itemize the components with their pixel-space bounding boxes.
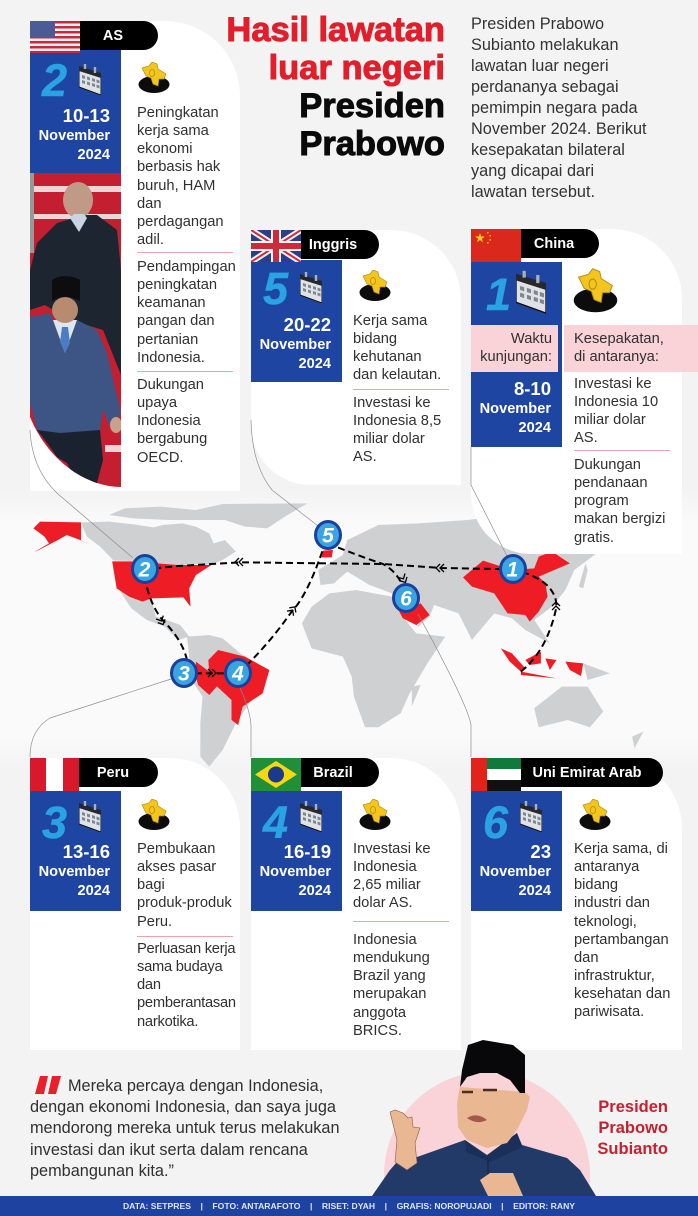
pill label [251,230,379,259]
card: AS: 2 [42,55,67,106]
text: Inggris points: Indonesia 8,5 [353,413,441,429]
card: AS: November [39,128,110,144]
text: AS points: dan [137,196,162,212]
text: China points: makan bergizi [574,511,665,527]
card: Uni Emirat Arab: 23 [530,841,551,862]
text: AS points: OECD. [137,450,184,466]
intro text: kesepakatan bilateral [471,141,625,159]
text: UEA points [574,841,670,1020]
text: China points: Dukungan [574,457,641,473]
text: Peru points: Pembukaan [137,841,215,857]
pill label [471,758,663,787]
card: Brazil [251,758,390,911]
text: UEA points: pariwisata. [574,1004,644,1020]
map pins: 3 [178,662,190,686]
text: Inggris points: Kerja sama [353,313,427,329]
card: Inggris: November [260,337,331,353]
text: Inggris points: dan kelautan. [353,367,441,383]
date box [251,260,342,382]
title [226,11,445,163]
intro text: lawatan luar negeri [471,57,609,75]
text: China points: program [574,493,629,509]
text: China points [574,376,670,546]
intro text: November 2024. Berikut [471,120,647,138]
card: Peru: November [39,864,110,880]
text: Peru points: Peru. [137,914,172,930]
panel: card Peru background [30,758,240,1050]
intro text: perdananya sebagai [471,78,619,96]
map pins: 1 [507,558,518,582]
card: AS [30,21,170,487]
title: Presiden [299,87,445,125]
title: luar negeri [269,49,445,87]
quote: investasi dan ikut serta dalam rencana [30,1141,308,1159]
card: Inggris: Inggris [309,237,357,253]
text: Peru points: dan [137,977,161,993]
caption: Presiden Prabowo Subianto: Subianto [597,1140,668,1158]
text: Peru points: akses pasar [137,859,216,875]
card: Inggris [251,230,390,382]
text: UEA points: industri dan [574,895,650,911]
card: Uni Emirat Arab: 2024 [519,882,551,898]
text: AS points: pangan dan [137,313,215,329]
card: AS: 10-13 [63,105,110,126]
text: Peru points: narkotika. [137,1014,198,1030]
quote: mendorong mereka untuk terus melakukan [30,1119,340,1137]
text: China points: Investasi ke [574,376,652,392]
label band: waktu kunjungan: kunjungan: [480,349,552,365]
text: AS points: pertanian [137,332,198,348]
text: AS points: Dukungan [137,377,204,393]
text: AS points: keamanan [137,295,206,311]
card: Uni Emirat Arab: November [480,864,551,880]
panel: card UEA background [471,758,682,1050]
text: AS points: peningkatan [137,277,217,293]
text: AS points: Pendampingan [137,259,236,275]
icon: quote mark [35,1076,61,1094]
text: AS points: bergabung [137,431,207,447]
text: AS points: adil. [137,232,164,248]
text: Peru points: pemberantasan [137,995,236,1011]
map pins: 5 [322,524,334,548]
card: Uni Emirat Arab: Uni Emirat Arab [532,765,642,781]
text: AS points: Indonesia [137,413,201,429]
illustration: Presiden Prabowo [372,1040,596,1196]
card: AS: AS [103,28,123,44]
text: Peru points: sama budaya [137,959,222,975]
card: Brazil: Brazil [313,765,353,781]
text: China points: Indonesia 10 [574,394,658,410]
quote [30,1077,340,1180]
text: Inggris points: Investasi ke [353,395,431,411]
text: Brazil points: 2,65 miliar [353,877,421,893]
label band: kesepakatan: di antaranya: [574,349,659,365]
text: Brazil points [353,841,449,1039]
flag: China [471,229,521,262]
card: Inggris: 20-22 [284,314,331,335]
text: AS points [137,105,236,466]
panel: card AS background [30,21,240,491]
intro text: lawatan tersebut. [471,183,595,201]
card: China: 2024 [519,420,551,436]
text: Brazil points: Investasi ke [353,841,431,857]
text: Brazil points: BRICS. [353,1023,402,1039]
card: Peru: Peru [97,765,129,781]
caption: Presiden Prabowo Subianto [597,1098,668,1158]
text: UEA points: infrastruktur, [574,968,655,984]
intro text: pemimpin negara pada [471,99,638,117]
text: AS points: buruh, HAM [137,178,215,194]
pill label [471,229,599,258]
card: Peru [30,758,170,911]
text: UEA points: antaranya [574,859,639,875]
map pins: 2 [138,558,151,582]
text: Inggris points: kehutanan [353,349,422,365]
date box [471,262,562,447]
text: AS points: kerja sama [137,123,209,139]
card: Peru: 3 [42,797,67,848]
panel: card Inggris background [251,230,461,485]
text: Brazil points: Indonesia [353,859,417,875]
text: UEA points: pertambangan [574,932,669,948]
text: Inggris points: miliar dolar [353,431,425,447]
quote: dengan ekonomi Indonesia, dan saya juga [30,1098,336,1116]
date box [471,791,562,911]
photo [30,173,121,487]
text: AS points: perdagangan [137,214,224,230]
date box [30,791,121,911]
intro text: yang dicapai dari [471,162,594,180]
text: Peru points [137,841,236,1030]
flag: UEA [471,758,521,791]
card: Brazil: 4 [263,797,288,848]
card: Brazil: 16-19 [284,841,331,862]
card: Peru: 2024 [78,882,110,898]
label band: waktu kunjungan: Waktu [511,331,552,347]
text: AS points: upaya [137,395,177,411]
card: China: 8-10 [514,378,551,399]
date box [251,791,342,911]
card: Uni Emirat Arab: 6 [483,797,508,848]
world map with route [34,504,643,766]
label band: waktu kunjungan [471,325,558,372]
map pins: 6 [400,588,412,610]
text: AS points: ekonomi [137,141,193,157]
text: AS points: Peningkatan [137,105,219,121]
intro text [471,15,647,201]
map pins: 4 [231,662,244,686]
text: Peru points: Perluasan kerja [137,941,235,957]
title: Prabowo [299,125,445,163]
footer credits: DATA: SETPRES | FOTO: ANTARAFOTO | RISET: DYAH | GRAFIS: NOROPUJADI | EDITOR: RANY [123,1201,575,1211]
text: Brazil points: Brazil yang [353,968,426,984]
text: Brazil points: mendukung [353,950,430,966]
text: China points: AS. [574,430,598,446]
title: Hasil lawatan [226,11,445,49]
card: Inggris: 2024 [299,356,331,372]
text: Inggris points: AS. [353,449,377,465]
card: China: November [480,401,551,417]
text: UEA points: teknologi, [574,914,637,930]
caption: Presiden Prabowo Subianto: Prabowo [598,1119,668,1137]
intro text: Presiden Prabowo [471,15,604,33]
label band: kesepakatan: Kesepakatan, [574,331,664,347]
panel: card Brazil background [251,758,461,1050]
text: China points: miliar dolar [574,412,646,428]
text: UEA points: bidang [574,877,618,893]
card: Brazil: November [260,864,331,880]
text: UEA points: kesehatan dan [574,986,670,1002]
label band: kesepakatan [564,325,698,372]
text: Inggris points: bidang [353,331,397,347]
text: AS points: berbasis hak [137,159,220,175]
card: Inggris: 5 [263,263,288,314]
card: China [471,229,698,447]
card: China: China [534,236,574,252]
card: AS: 2024 [78,146,110,162]
intro text: Subianto melakukan [471,36,619,54]
text: China points: gratis. [574,530,614,546]
text: Brazil points: anggota [353,1005,406,1021]
route arrowheads [156,558,560,678]
text: Inggris points [353,313,449,465]
text: Peru points: produk-produk [137,895,232,911]
text: Brazil points: Indonesia [353,932,417,948]
text: UEA points: dan [574,950,599,966]
footer credits [0,1196,698,1216]
text: UEA points: Kerja sama, di [574,841,668,857]
card: China: 1 [486,269,511,320]
quote: pembangunan kita.” [30,1162,174,1180]
flag: Brazil [251,758,301,791]
flag: USA [30,21,80,53]
pill label [30,758,158,787]
pill label [30,21,158,50]
caption: Presiden Prabowo Subianto: Presiden [598,1098,668,1116]
card: Brazil: 2024 [299,882,331,898]
panel: card China background [471,229,682,554]
card: Uni Emirat Arab [471,758,663,911]
pill label [251,758,379,787]
text: AS points: Indonesia. [137,350,205,366]
flag: Peru [30,758,79,791]
date box [30,50,121,173]
text: Brazil points: merupakan [353,986,426,1002]
flag: UK [251,230,301,262]
text: Brazil points: dolar AS. [353,895,413,911]
text: Peru points: bagi [137,877,165,893]
quote: Mereka percaya dengan Indonesia, [68,1077,323,1095]
card: Peru: 13-16 [63,841,110,862]
text: China points: pendanaan [574,475,648,491]
